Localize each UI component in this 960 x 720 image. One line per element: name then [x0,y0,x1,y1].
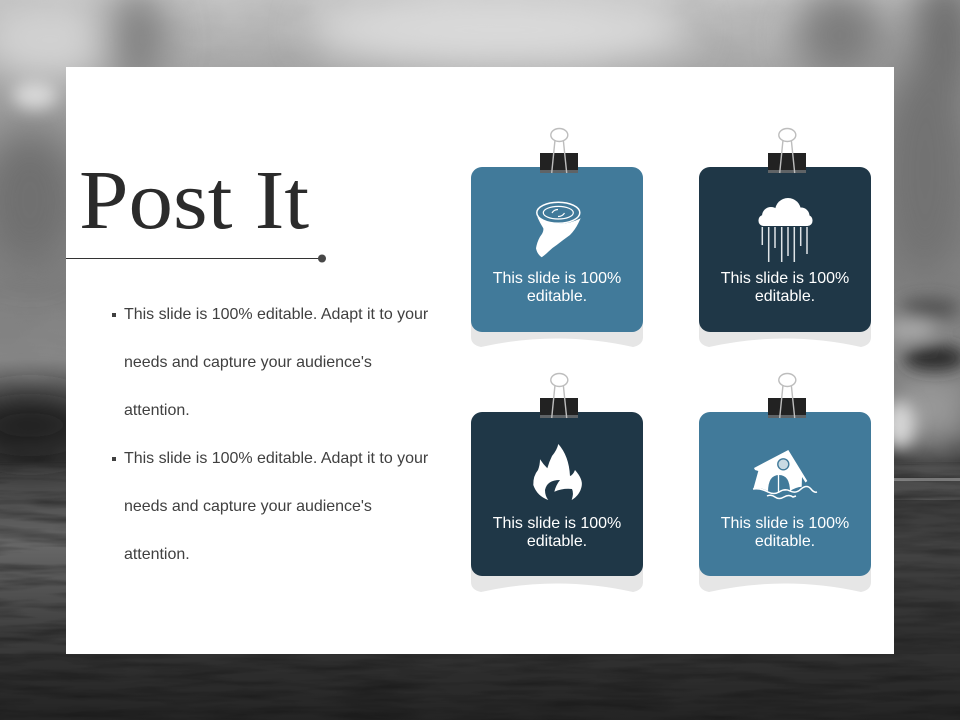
bullet text block 1 [112,306,428,419]
title: Post It [79,154,309,247]
post-it card: rain cloud: This slide is 100% [721,270,849,287]
bullet text block 2 [112,450,428,563]
bullet text block 1: This slide is 100% editable. Adapt it to your [124,306,428,323]
bullet text block 1: attention. [124,402,190,419]
post-it card: tornado [471,128,643,347]
bullet text block 2: attention. [124,546,190,563]
post-it card: rain cloud: editable. [755,288,815,305]
post-it card: rain cloud [699,128,871,347]
post-it card: tornado: editable. [527,288,587,305]
post-it card: flooded house [699,372,871,592]
post-it card: flame: editable. [527,533,587,550]
post-it card: flooded house: This slide is 100% [721,515,849,532]
bullet text block 2: needs and capture your audience's [124,498,372,515]
post-it card: flooded house: editable. [755,533,815,550]
post-it card: flame: This slide is 100% [493,515,621,532]
white content panel [66,67,894,654]
post-it card: tornado: This slide is 100% [493,270,621,287]
title underline with dot [66,254,326,262]
bullet text block 1: needs and capture your audience's [124,354,372,371]
post-it card: flame [471,372,643,592]
bullet text block 2: This slide is 100% editable. Adapt it to your [124,450,428,467]
